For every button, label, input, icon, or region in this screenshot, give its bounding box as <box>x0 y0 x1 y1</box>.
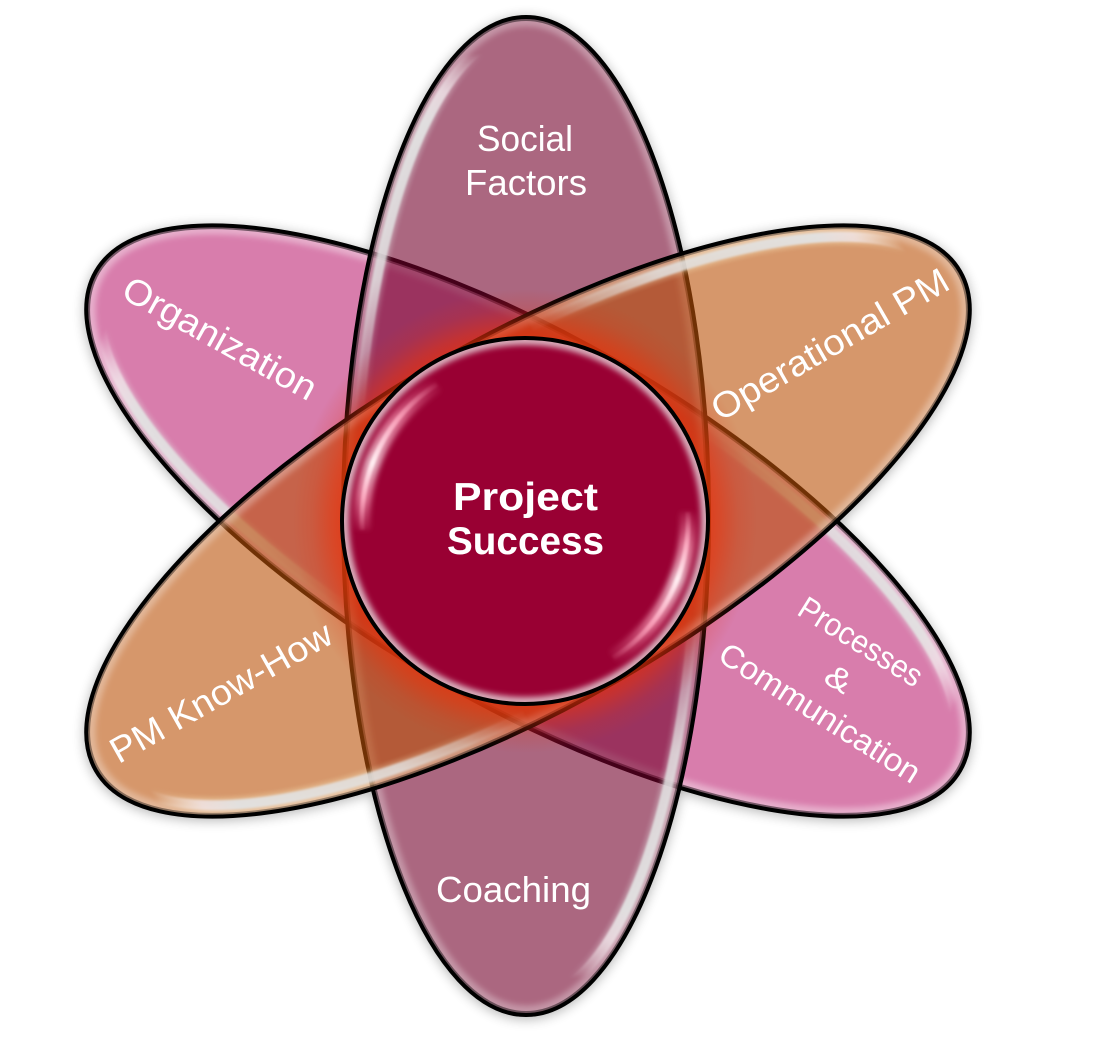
red glow around centre <box>293 289 757 753</box>
centre label: Success <box>447 520 604 563</box>
label: Social Factors <box>465 118 587 203</box>
centre label <box>447 476 604 563</box>
label: Organization: Organization <box>116 268 324 408</box>
petal: Social Factors and Coaching (mauve ellipse) <box>343 17 709 1015</box>
centre circle: Project Success <box>342 338 708 704</box>
label: Social Factors: Factors <box>465 162 587 203</box>
centre label: Project <box>453 476 598 519</box>
label: Processes and Communication: & <box>818 656 859 701</box>
petal: Organization and Processes (pink ellipse) <box>84 223 972 819</box>
label: Coaching: Coaching <box>436 869 591 910</box>
label: PM Know-How: PM Know-How <box>102 612 340 771</box>
label: Social Factors: Social <box>477 118 573 159</box>
label: Processes and Communication: Communication <box>712 635 927 790</box>
label: Operational PM: Operational PM <box>703 259 956 429</box>
label: Processes and Communication: Processes <box>792 589 930 694</box>
petal: Operational PM and PM Know-How (orange ellipse) <box>84 223 972 819</box>
